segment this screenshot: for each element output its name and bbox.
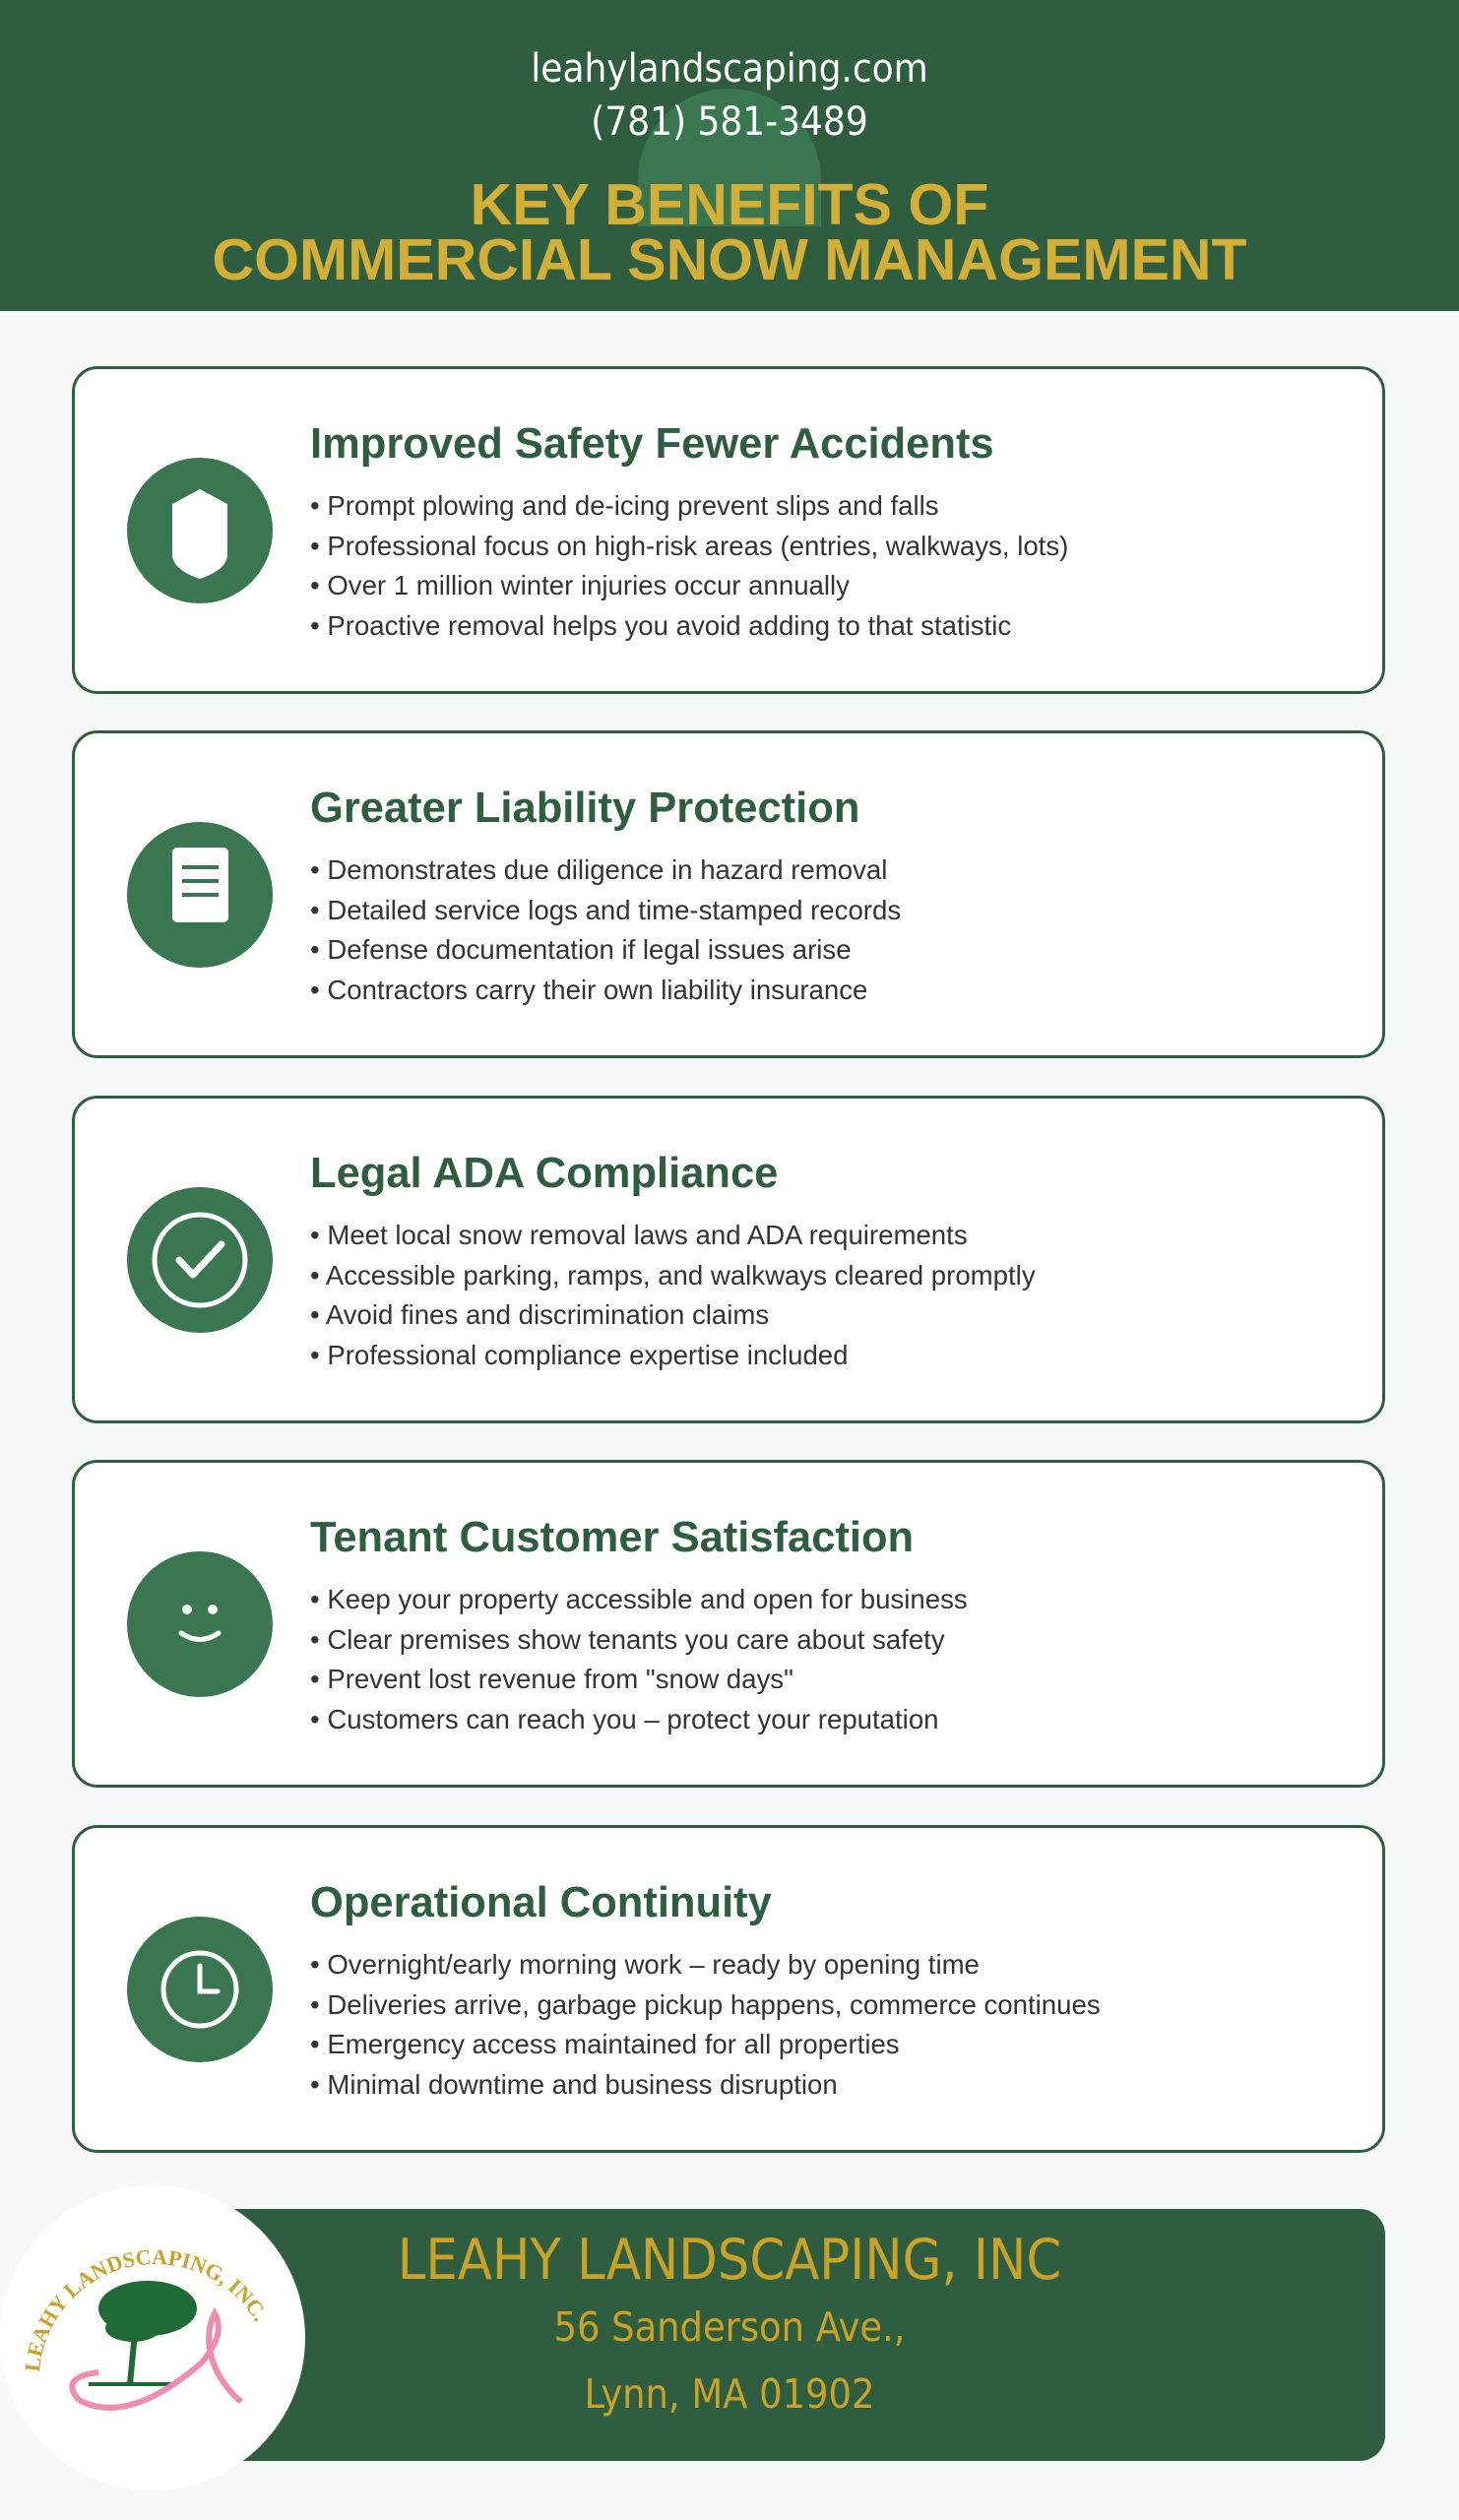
heading: Greater Liability Protection <box>310 785 859 832</box>
bullets: • Keep your property accessible and open for business <box>310 1584 968 1614</box>
bullets <box>310 1949 1101 2100</box>
bullets: • Avoid fines and discrimination claims <box>310 1299 769 1330</box>
bullets: • Clear premises show tenants you care about safety <box>310 1624 945 1655</box>
bullets: • Over 1 million winter injuries occur annually <box>310 570 850 600</box>
panel: satisfaction <box>72 1460 1385 1788</box>
bullets <box>310 854 901 1005</box>
bullets: • Overnight/early morning work – ready by opening time <box>310 1949 980 1980</box>
bullets: • Prevent lost revenue from "snow days" <box>310 1664 793 1694</box>
bullets: • Deliveries arrive, garbage pickup happens, commerce continues <box>310 1989 1101 2020</box>
heading: Operational Continuity <box>310 1879 772 1926</box>
address line 2: Lynn, MA 01902 <box>585 2370 874 2418</box>
heading: Legal ADA Compliance <box>310 1150 778 1197</box>
icon: shield <box>127 458 273 603</box>
icon: check <box>127 1187 273 1333</box>
title: COMMERCIAL SNOW MANAGEMENT <box>212 227 1247 292</box>
panel: continuity <box>72 1825 1385 2153</box>
address line 1: 56 Sanderson Ave., <box>554 2303 905 2351</box>
bullets: • Professional compliance expertise included <box>310 1340 849 1370</box>
icon: clock <box>127 1917 273 2062</box>
panel: ADA <box>72 1096 1385 1423</box>
bullets: • Customers can reach you – protect your reputation <box>310 1704 939 1734</box>
bullets: • Minimal downtime and business disruption <box>310 2069 838 2100</box>
bullets <box>310 1220 1036 1370</box>
header <box>0 0 1459 311</box>
phone: (781) 581-3489 <box>591 99 868 145</box>
bullets: • Proactive removal helps you avoid adding to that statistic <box>310 610 1011 641</box>
bullets: • Prompt plowing and de-icing prevent slips and falls <box>310 490 939 521</box>
heading: Improved Safety Fewer Accidents <box>310 420 994 468</box>
icon: document <box>127 822 273 968</box>
title <box>212 172 1247 292</box>
bullets: • Accessible parking, ramps, and walkways cleared promptly <box>310 1260 1036 1291</box>
panel: safety <box>72 366 1385 694</box>
bullets <box>310 1584 968 1734</box>
heading: Tenant Customer Satisfaction <box>310 1514 914 1561</box>
bullets: • Professional focus on high-risk areas (entries, walkways, lots) <box>310 531 1068 561</box>
icon: smiley <box>127 1551 273 1697</box>
bullets: • Meet local snow removal laws and ADA requirements <box>310 1220 968 1250</box>
bullets: • Defense documentation if legal issues arise <box>310 934 852 965</box>
bullets: • Emergency access maintained for all properties <box>310 2029 900 2059</box>
logo: LEAHY LANDSCAPING, INC. <box>26 2250 264 2372</box>
logo <box>0 2185 305 2490</box>
decorative arch <box>638 89 821 226</box>
panel: liability <box>72 730 1385 1058</box>
company name: LEAHY LANDSCAPING, INC <box>398 2228 1061 2293</box>
website: leahylandscaping.com <box>531 46 928 92</box>
bullets: • Detailed service logs and time-stamped records <box>310 895 901 925</box>
footer panel <box>197 2209 1385 2461</box>
bullets: • Contractors carry their own liability insurance <box>310 975 867 1005</box>
bullets <box>310 490 1068 641</box>
bullets: • Demonstrates due diligence in hazard removal <box>310 854 887 885</box>
title: KEY BENEFITS OF <box>471 172 988 237</box>
